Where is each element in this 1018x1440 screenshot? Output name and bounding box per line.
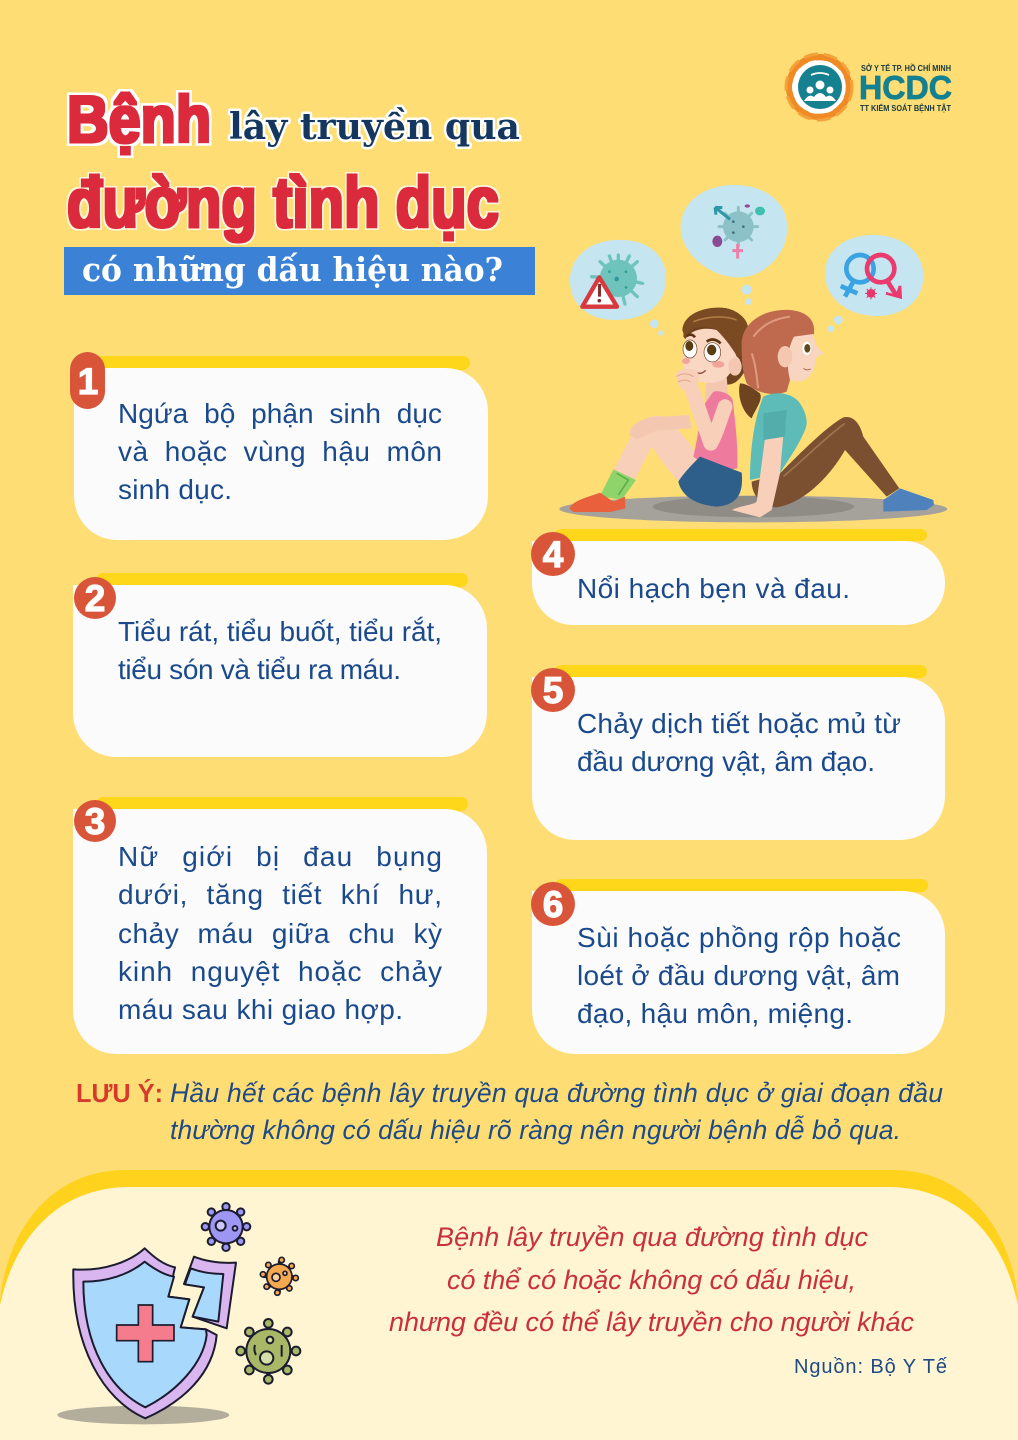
card 4	[531, 529, 945, 625]
card 3 text: Nữ giới bị đau bụng	[118, 841, 442, 872]
card 6	[531, 879, 945, 1054]
card 3 text: máu sau khi giao hợp.	[118, 994, 403, 1025]
card 5 panel	[532, 677, 945, 840]
medical cross	[117, 1305, 174, 1362]
back hair	[683, 308, 748, 384]
card 6 text: Sùi hoặc phồng rộp hoặc	[577, 922, 901, 953]
arm	[732, 435, 783, 517]
card 5	[531, 665, 945, 840]
bottom panel	[0, 1170, 1018, 1440]
logo: HCDC: HCDC	[859, 69, 952, 106]
top	[693, 391, 738, 470]
shoes	[569, 493, 625, 512]
card 3 number badge	[74, 800, 116, 842]
shield shadow	[57, 1406, 229, 1424]
card 5 accent bar	[555, 665, 927, 678]
ear	[728, 358, 742, 376]
card 6 text	[577, 922, 901, 1029]
card 6 number badge	[531, 882, 575, 926]
title: Bệnh: Bệnh	[67, 82, 211, 156]
thought bubble: warning virus	[570, 240, 666, 336]
card 2 text	[118, 616, 442, 685]
title: lây truyền qua: lây truyền qua	[229, 106, 520, 148]
card 1 number badge	[70, 352, 105, 409]
neck	[705, 377, 728, 410]
card 6 text: đạo, hậu môn, miệng.	[577, 998, 853, 1029]
card 6 number badge: 6	[543, 884, 563, 925]
card 5 text	[577, 708, 901, 777]
card 5 text: đầu dương vật, âm đạo.	[577, 746, 875, 777]
shirt	[750, 393, 807, 480]
title block	[64, 82, 535, 295]
source note: Nguồn: Bộ Y Tế	[794, 1356, 947, 1378]
card 1 text: sinh dục.	[118, 474, 232, 505]
card 1 number badge: 1	[78, 361, 98, 402]
card 2 text: tiểu són và tiểu ra máu.	[118, 654, 401, 685]
card 4 number badge	[531, 532, 575, 576]
card 1 text: và hoặc vùng hậu môn	[118, 436, 442, 467]
card 3 text: chảy máu giữa chu kỳ	[118, 918, 442, 949]
arm to chin	[692, 388, 725, 443]
virus: purple	[202, 1203, 250, 1251]
card 3 panel	[73, 809, 487, 1054]
thought bubble: gender symbols	[825, 235, 923, 332]
subtitle banner: có những dấu hiệu nào?	[82, 250, 503, 289]
logo: HCDC: TT KIỂM SOÁT BỆNH TẬT	[860, 104, 951, 113]
card 1	[70, 352, 488, 540]
socks	[600, 469, 636, 500]
hand	[676, 369, 699, 391]
ground shadow	[559, 496, 947, 522]
card 2 number badge: 2	[85, 578, 105, 619]
card 6 panel	[532, 891, 945, 1054]
logo: HCDC: SỞ Y TẾ TP. HỒ CHÍ MINH	[861, 63, 951, 73]
shield main piece	[73, 1248, 217, 1418]
card 4 number badge: 4	[543, 534, 564, 575]
person: right girl	[732, 310, 934, 517]
card 2 accent bar	[96, 573, 468, 587]
eyes	[683, 340, 697, 358]
card 5 number badge	[531, 668, 575, 712]
card 5 text: Chảy dịch tiết hoặc mủ từ	[577, 708, 901, 739]
card 1 panel	[74, 368, 488, 540]
card 5 number badge: 5	[543, 670, 563, 711]
thought bubble: virus and bacteria	[681, 185, 787, 305]
card 2 panel	[73, 585, 487, 757]
card 1 accent bar	[96, 356, 470, 370]
ponytail	[739, 383, 761, 418]
illustration: two people sitting back to back thinking	[559, 185, 947, 522]
forearm resting on knee	[629, 415, 692, 439]
shoe	[883, 488, 934, 512]
card 6 accent bar	[555, 879, 928, 892]
pants	[752, 417, 899, 507]
card 4 accent bar	[555, 529, 927, 541]
card 3 text: kinh nguyệt hoặc chảy	[118, 956, 442, 987]
bottom panel yellow band	[0, 1170, 1018, 1440]
face	[788, 334, 824, 382]
closing message: Bệnh lây truyền qua đường tình dục	[436, 1222, 868, 1252]
card 3 number badge: 3	[85, 801, 105, 842]
note: LƯU Ý	[76, 1078, 943, 1145]
logo emblem	[786, 54, 852, 120]
card 6 text: loét ở đầu dương vật, âm	[577, 960, 900, 991]
logo: HCDC	[786, 54, 952, 120]
bangs	[682, 308, 748, 358]
note: LƯU Ý: thường không có dấu hiệu rõ ràng nên người bệnh dễ bỏ qua.	[170, 1115, 901, 1145]
card 3 text: dưới, tăng tiết khí hư,	[118, 879, 442, 910]
face	[683, 329, 740, 383]
leg	[613, 416, 707, 483]
card 3	[73, 797, 487, 1054]
person: left girl	[569, 308, 748, 512]
card 2	[73, 573, 487, 757]
card 4 text: Nổi hạch bẹn và đau.	[577, 573, 850, 604]
card 2 number badge	[74, 577, 116, 619]
virus: orange	[260, 1257, 298, 1295]
hair	[742, 310, 814, 394]
closing message: có thể có hoặc không có dấu hiệu,	[447, 1265, 856, 1295]
closing message	[389, 1222, 914, 1337]
note: LƯU Ý: LƯU Ý:	[76, 1078, 163, 1108]
virus: green	[236, 1319, 300, 1384]
card 3 text	[118, 841, 442, 1025]
note: LƯU Ý: Hầu hết các bệnh lây truyền qua đường tình dục ở giai đoạn đầu	[170, 1078, 943, 1108]
card 1 text: Ngứa bộ phận sinh dục	[118, 398, 442, 429]
card 4 panel	[532, 541, 945, 625]
icon: cracked shield with viruses	[57, 1203, 300, 1424]
shield broken piece	[184, 1257, 236, 1328]
closing message: nhưng đều có thể lây truyền cho người khác	[389, 1307, 914, 1337]
card 3 accent bar	[96, 797, 468, 811]
title: đường tình dục: đường tình dục	[67, 164, 499, 243]
card 2 text: Tiểu rát, tiểu buốt, tiểu rắt,	[118, 616, 442, 647]
card 1 text	[118, 398, 442, 505]
shorts	[678, 457, 742, 507]
bottom panel cream background	[0, 1187, 1018, 1440]
